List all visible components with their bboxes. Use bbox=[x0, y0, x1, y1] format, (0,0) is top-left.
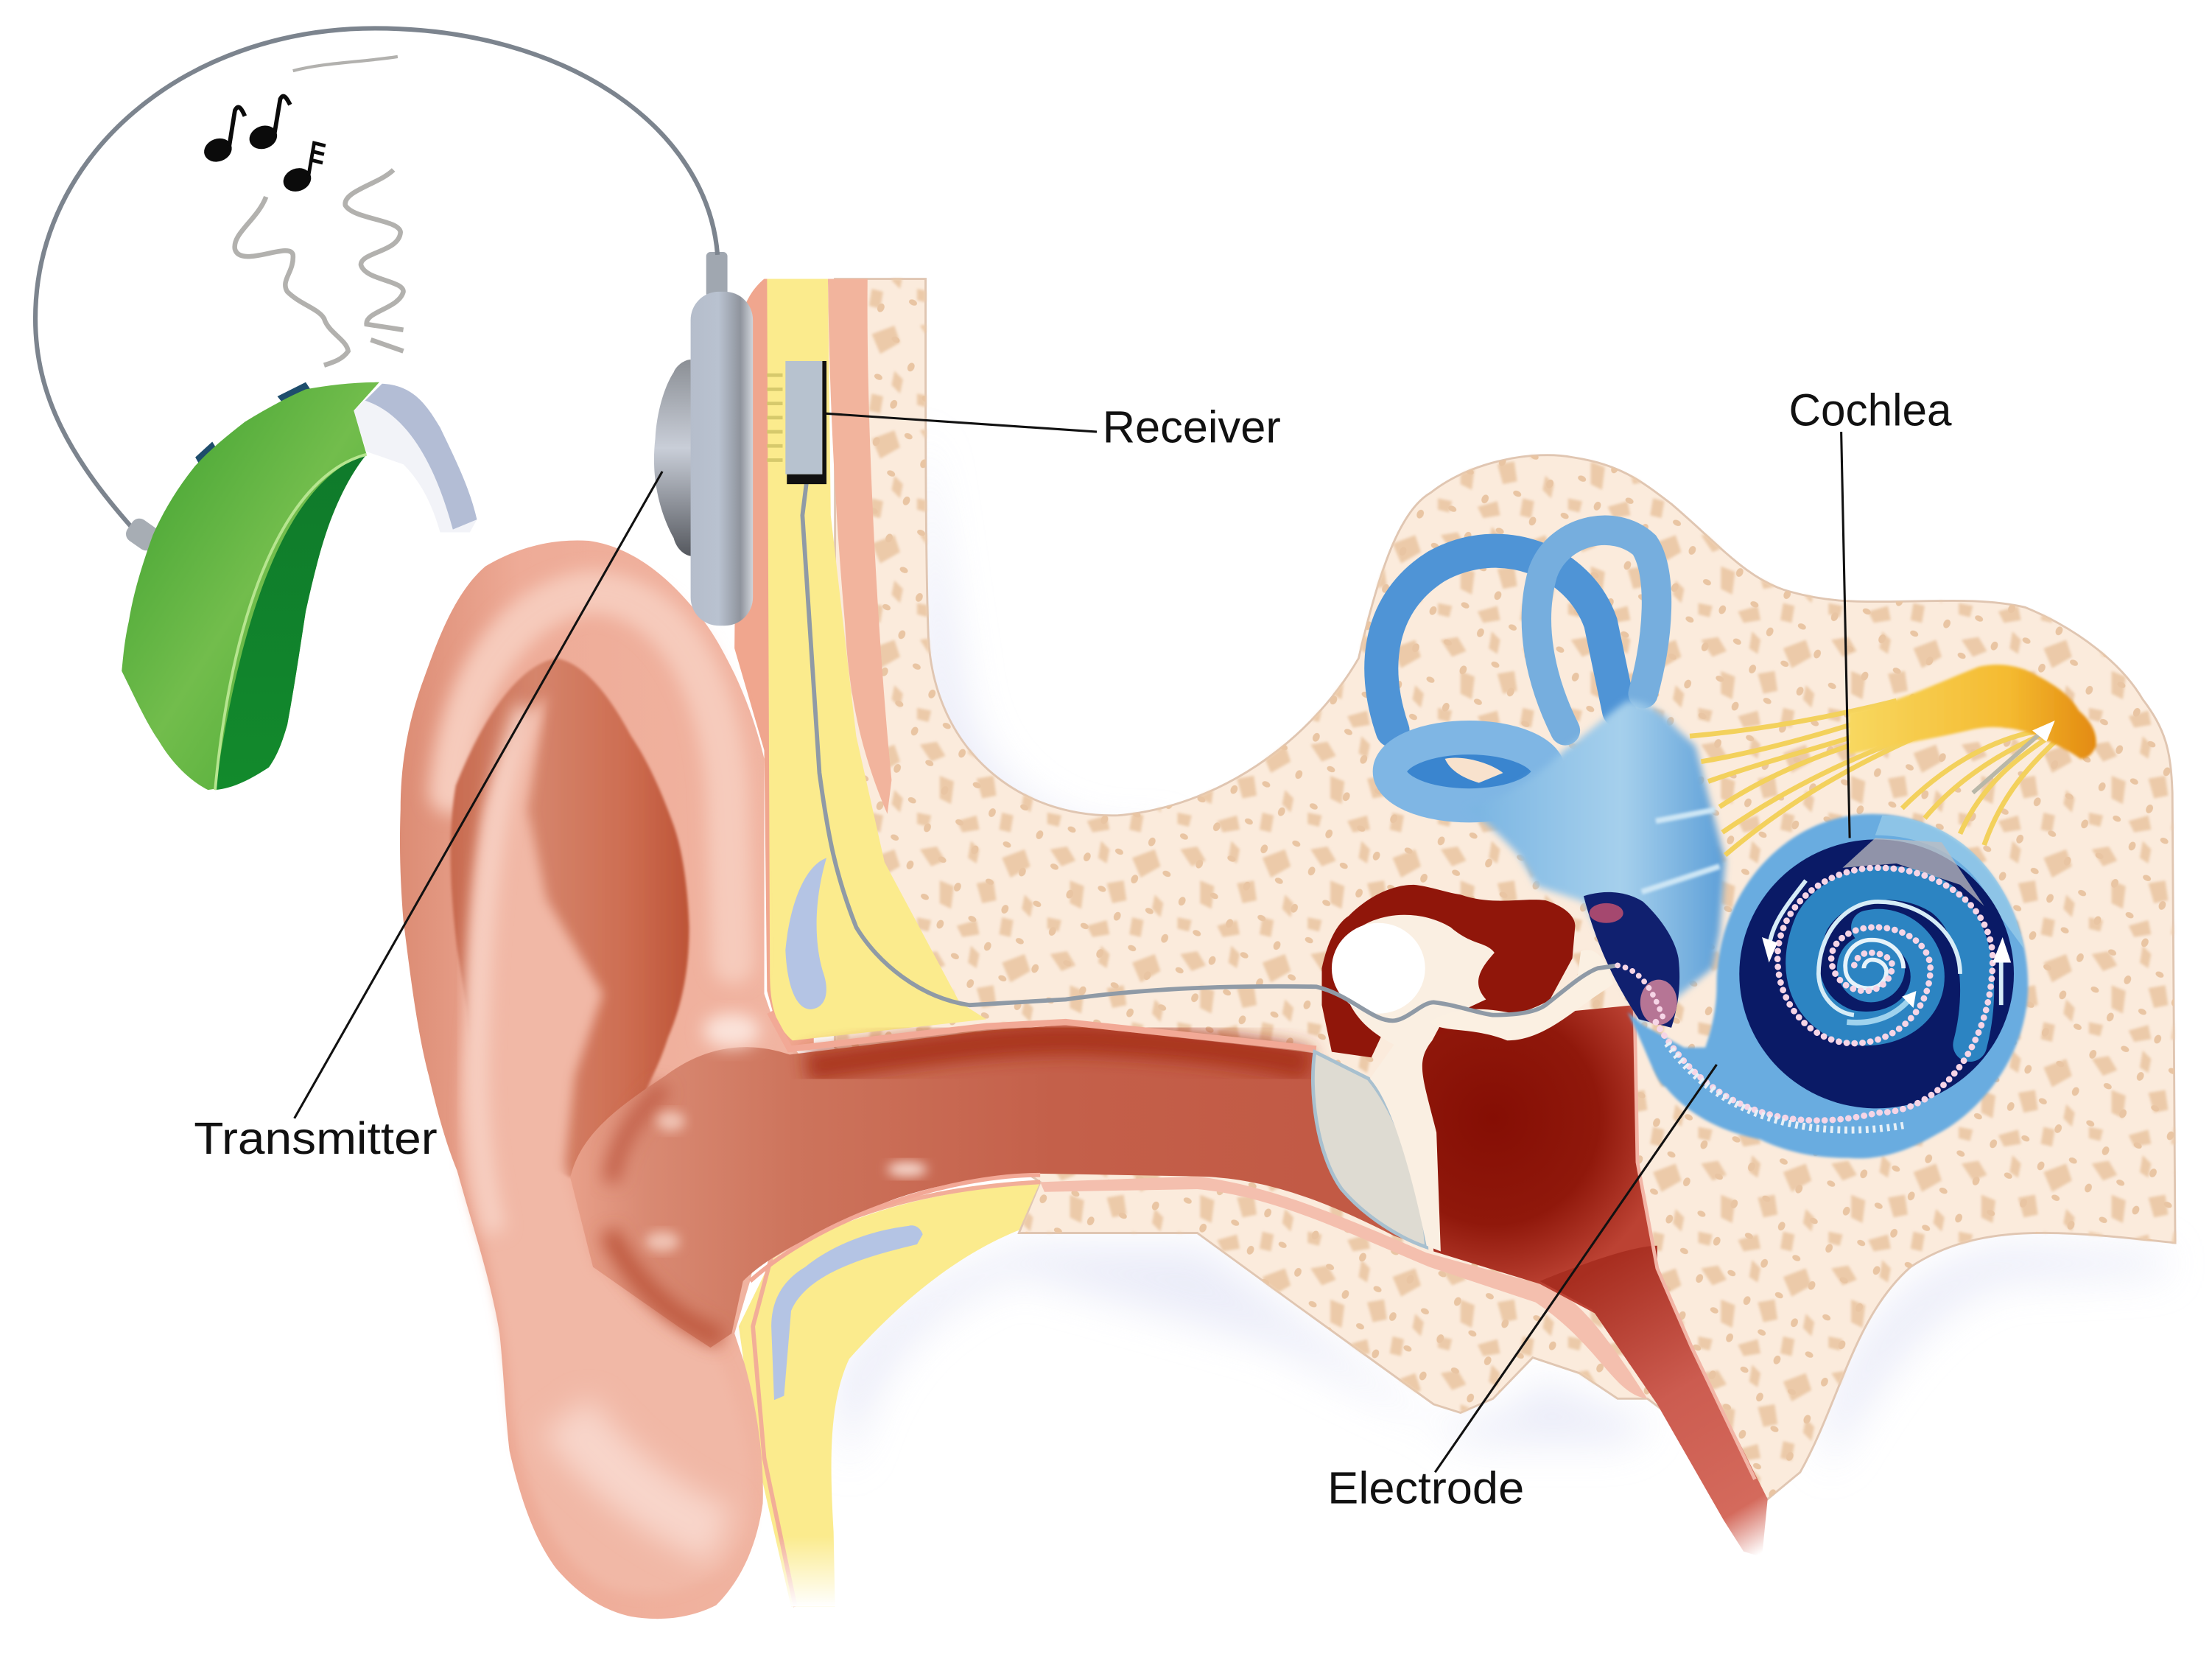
lower ear canal skin layers bbox=[734, 1177, 1647, 1607]
connecting cable bbox=[35, 28, 717, 535]
light top overlay bbox=[1875, 816, 2023, 948]
leader line: electrode bbox=[1435, 1065, 1717, 1472]
helix highlight bbox=[450, 592, 733, 963]
centre of spiral bbox=[1837, 934, 1905, 1002]
background shadow around bone bbox=[835, 424, 2166, 1472]
cochlea bbox=[1628, 814, 2028, 1158]
blue spiral band bbox=[1802, 883, 1977, 1045]
antihelix bbox=[460, 693, 751, 1595]
upper ear canal skin layers bbox=[734, 279, 986, 1048]
pinna bbox=[400, 540, 800, 1619]
leader line: transmitter bbox=[295, 472, 662, 1118]
label: electrode: Electrode bbox=[1327, 1462, 1524, 1513]
eustachian tube and middle ear cavity bbox=[1321, 885, 1768, 1557]
electrode wire bbox=[802, 481, 1618, 1020]
leader line: receiver bbox=[824, 413, 1097, 432]
label: receiver: Receiver bbox=[1103, 402, 1281, 452]
inner ear: vestibule bbox=[1466, 701, 1725, 1025]
canal highlights bbox=[703, 1014, 760, 1048]
ear canal bbox=[570, 1012, 1427, 1348]
dark interior bbox=[1739, 839, 2014, 1108]
external transmitter bbox=[654, 252, 753, 626]
basal electrode dots bbox=[1667, 1043, 1903, 1130]
temporal bone bbox=[835, 279, 2175, 1499]
fibres in cochlea bbox=[1843, 838, 1984, 906]
label: transmitter: Transmitter bbox=[194, 1113, 438, 1164]
ossicles bbox=[1332, 915, 1613, 1251]
eardrum bbox=[1313, 1052, 1427, 1247]
electrode spiral bbox=[1656, 868, 1992, 1121]
basal turn bbox=[1628, 814, 2028, 1158]
hearing processor bbox=[122, 382, 477, 790]
white spiral bbox=[1819, 902, 1960, 1015]
cochlear nerve bbox=[1690, 665, 2096, 855]
sound waves bbox=[235, 57, 404, 365]
flow arrows bbox=[1769, 880, 1806, 951]
round window chamber bbox=[1584, 892, 1679, 1028]
music notes bbox=[201, 97, 326, 195]
label: cochlea: Cochlea bbox=[1789, 385, 1952, 436]
leader line: cochlea bbox=[1841, 432, 1850, 838]
canal linings bbox=[770, 1012, 1316, 1049]
implanted receiver bbox=[767, 361, 826, 484]
scapha and upper concha bbox=[451, 658, 689, 1178]
inner ear: semicircular canals bbox=[1381, 530, 1657, 805]
